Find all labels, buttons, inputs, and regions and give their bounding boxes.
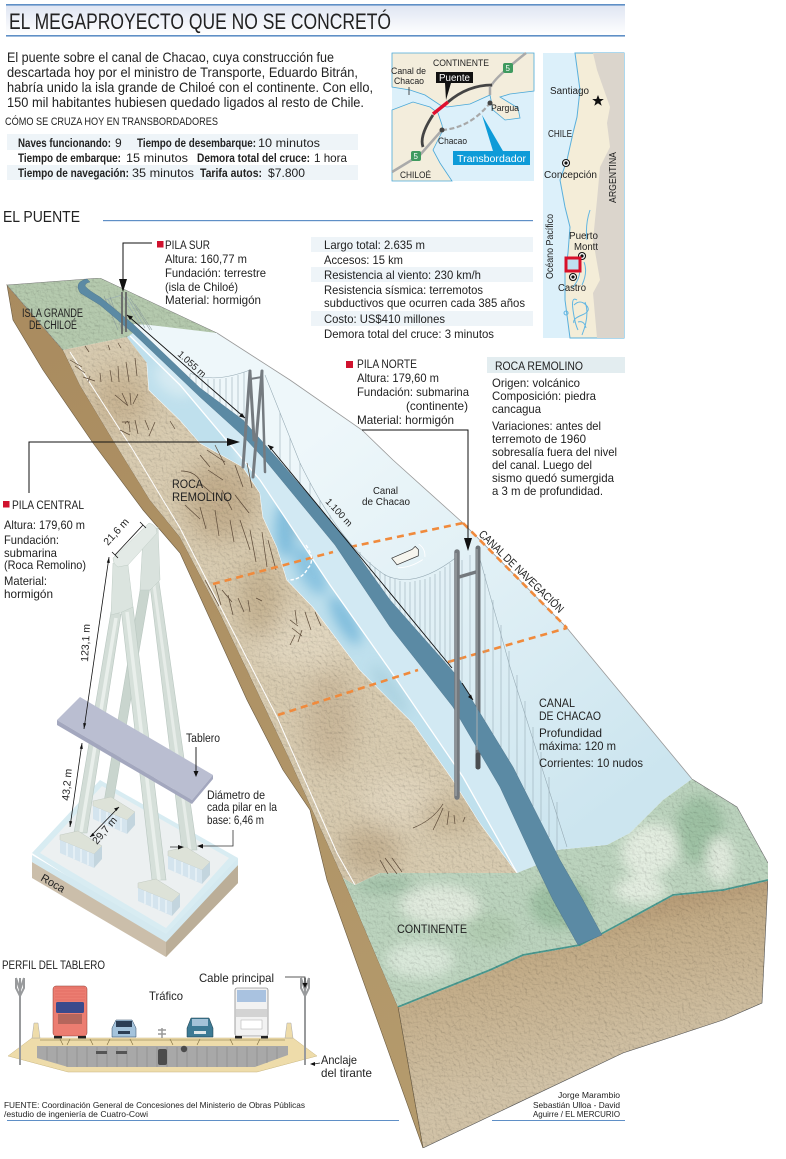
- icon: white bus: [235, 988, 268, 1038]
- map labels on terrain: [22, 308, 566, 936]
- locator map: Chile: Montt: [574, 242, 598, 253]
- callout: Pila Sur: [119, 238, 266, 307]
- ferry data table: [7, 134, 358, 180]
- dimension: 123,1 m: [79, 557, 110, 729]
- median barrier: [158, 1028, 166, 1038]
- callout: Pila Norte: (continente): [406, 399, 468, 413]
- rear footings: [93, 797, 135, 834]
- panel: Roca Remolino: a 3 m de profundidad.: [492, 484, 603, 498]
- label: Tablero: Tablero: [186, 733, 220, 745]
- label: Cable principal: [199, 971, 308, 988]
- map labels on terrain: Canal: [373, 485, 398, 497]
- credits: Sebastián Ulloa - David: [533, 1100, 620, 1110]
- intro text: [7, 49, 373, 110]
- locator map: bridge detail: 5: [506, 64, 510, 73]
- label: Anclaje del tirante: Anclaje: [321, 1053, 357, 1067]
- label: Cable principal: Cable principal: [199, 971, 274, 985]
- callout: Pila Norte: Altura: 179,60 m: [357, 371, 439, 385]
- intro text: habría unido la isla grande de Chiloé con el continente. Con ello,: [7, 79, 373, 95]
- front legs: [74, 607, 166, 880]
- dimension: 123,1 m: 123,1 m: [79, 623, 93, 662]
- callout: Pila Central: [3, 438, 240, 601]
- map labels on terrain: CONTINENTE: [397, 922, 467, 936]
- section heading: El puente: EL PUENTE: [3, 209, 80, 226]
- label: Roca: Roca: [38, 872, 68, 896]
- ferry data table: Demora total del cruce:: [197, 151, 310, 165]
- tower: Pila Central: [243, 371, 265, 477]
- title band: [6, 4, 625, 37]
- panel: Roca Remolino: terremoto de 1960: [492, 432, 586, 446]
- dimension: 43,2 m: 43,2 m: [60, 768, 75, 801]
- ferry data table: 10 minutos: [258, 136, 320, 150]
- label: pillar diameter: cada pilar en la: [207, 800, 277, 814]
- Roca Remolino outline: [288, 545, 312, 580]
- bridge facts: Largo total: 2.635 m: [324, 238, 425, 252]
- icon: city markers: [562, 160, 586, 280]
- callout: Pila Sur: PILA SUR: [165, 238, 210, 252]
- bridge facts: Accesos: 15 km: [324, 253, 403, 267]
- credits: Jorge Marambio: [558, 1090, 620, 1100]
- dimension: 1.055 m: [127, 315, 245, 418]
- base slab and rock: [32, 780, 238, 957]
- callout: Puente: Puente: [439, 72, 470, 84]
- ferry data table: 9: [115, 136, 122, 150]
- callout: Pila Sur: Material: hormigón: [165, 293, 261, 307]
- bridge facts: Costo: US$410 millones: [324, 312, 445, 326]
- callout: Pila Central: PILA CENTRAL: [12, 498, 84, 512]
- locator map: bridge detail: Pargua: [491, 103, 520, 114]
- diagram: central pier detail: [32, 516, 277, 957]
- map labels on terrain: de Chacao: [362, 496, 410, 508]
- map labels on terrain: DE CHILOÉ: [29, 319, 77, 332]
- label: Anclaje del tirante: del tirante: [321, 1066, 372, 1080]
- label: Canal de Chacao data: Profundidad: [539, 726, 602, 740]
- callout: Pila Central: Fundación:: [4, 533, 59, 547]
- callout: Pila Norte: Fundación: submarina: [357, 385, 469, 399]
- terrain edge line: [217, 333, 692, 779]
- panel: Roca Remolino: Variaciones: antes del: [492, 419, 601, 433]
- callout: Pila Central: Altura: 179,60 m: [4, 518, 85, 532]
- icon: road shields: [411, 63, 513, 161]
- locator map: bridge detail: [391, 53, 534, 181]
- bridge facts: Demora total del cruce: 3 minutos: [324, 327, 494, 341]
- panel: Roca Remolino: Composición: piedra: [492, 389, 596, 403]
- dimension: 1.100 m: [268, 445, 473, 700]
- callout: Pila Sur: Altura: 160,77 m: [165, 252, 247, 266]
- source note: FUENTE: Coordinación General de Concesiones del Ministerio de Obras Públicas: [4, 1100, 305, 1110]
- label: pillar diameter: Diámetro de: [207, 788, 265, 802]
- label: Canal de Chacao data: [539, 696, 643, 770]
- ferry data table: 1 hora: [314, 151, 347, 165]
- intro text: 150 mil habitantes hubiesen quedado ligados al resto de Chile.: [7, 94, 364, 110]
- dimension: 29,7 m: 29,7 m: [90, 814, 120, 847]
- locator map: Chile: Puerto: [569, 231, 598, 242]
- source note: [4, 1100, 399, 1121]
- ferry data table: Tiempo de desembarque:: [137, 136, 256, 150]
- locator map: Chile: Concepción: [544, 170, 597, 181]
- locator map: Chile: ARGENTINA: [608, 152, 619, 203]
- intro text: descartada hoy por el ministro de Transporte, Eduardo Bitrán,: [7, 64, 358, 80]
- terrain: island top: [7, 278, 217, 350]
- locator map: Chile: Santiago: [550, 86, 589, 97]
- rear pole base: [476, 755, 480, 767]
- deck section: [8, 1038, 317, 1072]
- icon: blue car: [112, 1020, 136, 1037]
- side barriers: [32, 1023, 293, 1038]
- callout: Pila Sur: (isla de Chiloé): [165, 280, 238, 294]
- ferry data table: Tiempo de embarque:: [18, 151, 121, 165]
- locator map: bridge detail: Canal de: [391, 66, 426, 77]
- back legs: [104, 575, 197, 850]
- bridge facts: Resistencia sísmica: terremotos: [324, 283, 483, 297]
- callout: Pila Norte: PILA NORTE: [357, 357, 417, 371]
- locator map: bridge detail: 5: [414, 152, 418, 161]
- orange navigation channel line: [213, 523, 567, 715]
- tower: north pier rear pole: [476, 548, 480, 767]
- terrain: channel water under deck: [127, 333, 537, 873]
- ferry subheading: CÓMO SE CRUZA HOY EN TRANSBORDADORES: [5, 115, 218, 128]
- panel: Roca Remolino: [487, 357, 625, 498]
- tower: Pila Norte front pole: [456, 549, 477, 797]
- label: pillar diameter: base: 6,46 m: [207, 813, 264, 827]
- locator map: Chile: CHILE: [548, 129, 572, 140]
- label: Tráfico: Tráfico: [149, 989, 183, 1003]
- source note: /estudio de ingeniería de Cuatro-Cowi: [4, 1109, 148, 1119]
- panel: Roca Remolino: sobresalía fuera del nivel: [492, 445, 617, 459]
- locator map: bridge detail: Chacao: [394, 76, 424, 87]
- label: Canal de Chacao data: DE CHACAO: [539, 709, 601, 723]
- pylons: [16, 978, 309, 1065]
- panel: Roca Remolino: Origen: volcánico: [492, 376, 580, 390]
- terrain: main channel surface: [133, 324, 692, 865]
- panel: Roca Remolino: ROCA REMOLINO: [495, 359, 583, 373]
- label: Canal de Chacao data: máxima: 120 m: [539, 739, 616, 753]
- callout: Pila Central: Material:: [4, 574, 47, 588]
- intro text: El puente sobre el canal de Chacao, cuya construcción fue: [7, 49, 334, 65]
- terrain block: [7, 278, 768, 1148]
- panel: Roca Remolino: del canal. Luego del: [492, 458, 592, 472]
- terrain: pale ribbon beside deck: [130, 333, 537, 873]
- map labels on terrain: CANAL DE NAVEGACIÓN: [476, 528, 566, 616]
- map labels on terrain: REMOLINO: [172, 492, 232, 504]
- icon: red truck: [53, 986, 87, 1038]
- ferry data table: $7.800: [268, 166, 305, 180]
- panel: Roca Remolino: cancagua: [492, 402, 541, 416]
- dimension: 21,6 m: 21,6 m: [101, 516, 132, 548]
- terrain: seabed sand: [63, 337, 517, 885]
- ferry data table: 35 minutos: [132, 166, 194, 180]
- pier top frame: [111, 523, 160, 615]
- panel: Roca Remolino: sismo quedó sumergida: [492, 471, 614, 485]
- terrain: continent green: [343, 779, 768, 1007]
- ferry data table: 15 minutos: [126, 151, 188, 165]
- callout: Puente: [436, 72, 473, 100]
- icon: teal car: [187, 1018, 213, 1037]
- ferry data table: Tiempo de navegación:: [18, 166, 129, 180]
- ferry boat: [390, 543, 427, 571]
- cables and hangers: [104, 295, 567, 853]
- label: Tablero: [186, 733, 220, 777]
- callout: Transbordador: [453, 115, 530, 165]
- terrain: sand white lines: [70, 352, 517, 885]
- callout: Pila Norte: Material: hormigón: [357, 413, 454, 427]
- locator map: Chile: Castro: [558, 283, 586, 294]
- heading: perfil del tablero: PERFIL DEL TABLERO: [2, 958, 105, 972]
- terrain: ridge gullies on seabed: [70, 343, 465, 874]
- callout: Pila Norte: [346, 357, 472, 551]
- bridge facts: subductivos que ocurren cada 385 años: [324, 296, 525, 310]
- bridge facts: Resistencia al viento: 230 km/h: [324, 268, 481, 282]
- callout: Pila Sur: Fundación: terrestre: [165, 266, 266, 280]
- map labels on terrain: ISLA GRANDE: [22, 308, 83, 320]
- locator map: bridge detail: CONTINENTE: [433, 58, 489, 69]
- terrain: front face: [398, 880, 768, 1148]
- deck slab: [57, 697, 213, 804]
- dimension: 21,6 m: [101, 516, 146, 558]
- title: EL MEGAPROYECTO QUE NO SE CONCRETÓ: [9, 9, 391, 34]
- ferry data table: Tarifa autos:: [200, 166, 262, 180]
- callout: Pila Central: hormigón: [4, 587, 53, 601]
- locator map: Chile: [543, 53, 624, 338]
- locator map: bridge detail: CHILOÉ: [400, 170, 431, 181]
- dimension: 1.100 m: 1.100 m: [323, 497, 354, 529]
- dimension: 1.055 m: 1.055 m: [175, 349, 208, 380]
- bridge facts: [311, 237, 533, 341]
- tower: Pila Sur: [122, 292, 126, 334]
- front footings: [60, 831, 102, 868]
- credits: Aguirre / EL MERCURIO: [533, 1109, 620, 1119]
- label: pillar diameter: [170, 788, 277, 850]
- label: Anclaje del tirante: [310, 1053, 372, 1080]
- credits: [492, 1090, 625, 1121]
- label: Canal de Chacao data: Corrientes: 10 nudos: [539, 756, 643, 770]
- ferry data table: Naves funcionando:: [18, 136, 111, 150]
- locator map: bridge detail: Chacao: [438, 136, 467, 147]
- label: Canal de Chacao data: CANAL: [539, 696, 575, 710]
- terrain: left brown side: [7, 285, 423, 1148]
- callout: Transbordador: Transbordador: [457, 153, 527, 165]
- diagram: deck profile: [8, 978, 317, 1072]
- map labels on terrain: ROCA: [172, 479, 203, 491]
- icon: star: [592, 95, 604, 106]
- dimension: 43,2 m: [60, 743, 83, 827]
- callout: Pila Central: submarina: [4, 546, 57, 560]
- bridge deck: [78, 279, 602, 945]
- icon: red locator square: [566, 258, 580, 271]
- locator map: Chile: Océano Pacífico: [545, 214, 556, 279]
- callout: Pila Central: (Roca Remolino): [4, 558, 86, 572]
